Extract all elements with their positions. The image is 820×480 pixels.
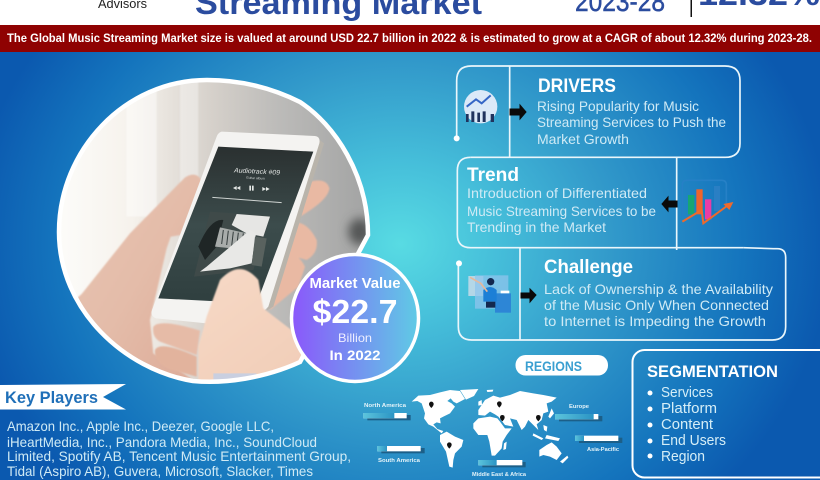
description: Lack of Ownership & the Availability bbox=[544, 281, 773, 297]
photo: hands holding phone bbox=[50, 77, 383, 410]
heading: DRIVERS bbox=[538, 76, 616, 97]
panel: segmentation bbox=[632, 350, 820, 478]
bar: south america bbox=[377, 446, 425, 453]
bar: asia-pacific bbox=[575, 436, 622, 443]
header bbox=[98, 0, 820, 21]
bar: north america bbox=[363, 413, 411, 420]
icon: bar chart bbox=[682, 180, 733, 223]
description: Trending in the Market bbox=[467, 219, 606, 235]
regions pill bbox=[516, 355, 608, 376]
bar: europe bbox=[555, 414, 602, 421]
region labels: Middle East & Africa bbox=[472, 472, 527, 478]
description: Rising Popularity for Music bbox=[537, 98, 699, 114]
list: Services bbox=[661, 385, 713, 401]
description bbox=[544, 281, 773, 329]
summary band bbox=[0, 25, 820, 52]
summary band: The Global Music Streaming Market size is valued at around USD 22.7 billion in 2022 & is estimated to grow at a CAGR of about 12.32% during 2023-28. bbox=[7, 33, 812, 45]
banner bbox=[0, 384, 126, 410]
description: of the Music Only When Connected bbox=[544, 297, 769, 313]
company list bbox=[7, 418, 351, 479]
value: $22.7 bbox=[312, 293, 398, 330]
bar: middle east and africa bbox=[478, 460, 526, 467]
company list: Amazon Inc., Apple Inc., Deezer, Google LLC, bbox=[7, 418, 274, 434]
heading: Challenge bbox=[544, 257, 633, 278]
map pins bbox=[429, 401, 541, 449]
key players bbox=[0, 384, 351, 479]
heading: SEGMENTATION bbox=[647, 363, 778, 381]
regions pill: REGIONS bbox=[525, 359, 582, 374]
region labels: Europe bbox=[569, 404, 589, 410]
market value badge bbox=[292, 254, 418, 382]
panel: challenge bbox=[456, 248, 786, 340]
description: to Internet is Impeding the Growth bbox=[544, 313, 766, 329]
list bbox=[648, 385, 726, 465]
CAGR value bbox=[690, 0, 820, 17]
company list: Limited, Spotify AB, Tencent Music Entertainment Group, bbox=[7, 448, 351, 464]
description bbox=[467, 185, 656, 235]
banner: Key Players bbox=[5, 389, 98, 407]
arrow bbox=[662, 197, 677, 211]
description: Streaming Services to Push the bbox=[537, 114, 726, 130]
company list: iHeartMedia, Inc., Pandora Media, Inc., SoundCloud bbox=[7, 434, 317, 450]
arrow bbox=[510, 105, 526, 119]
list: End Users bbox=[661, 433, 726, 449]
panel: trend bbox=[457, 157, 743, 250]
photo: hands holding phone: Guitar album bbox=[246, 176, 265, 181]
description bbox=[537, 98, 726, 147]
label: market value: Market Value bbox=[310, 276, 400, 292]
unit: Billion bbox=[338, 331, 372, 345]
icon: growth team bbox=[464, 90, 497, 123]
icon: person with screens bbox=[468, 275, 511, 313]
heading: Trend bbox=[467, 165, 519, 186]
arrow bbox=[521, 289, 536, 302]
description: Introduction of Differentiated bbox=[467, 185, 647, 201]
company list: Tidal (Aspiro AB), Guvera, Microsoft, Slacker, Times bbox=[7, 463, 313, 479]
region labels: South America bbox=[378, 458, 421, 464]
description: Market Growth bbox=[537, 131, 629, 147]
list: Platform bbox=[661, 401, 717, 417]
list: Content bbox=[661, 417, 713, 433]
region labels: North America bbox=[364, 403, 407, 409]
panel: drivers bbox=[454, 66, 740, 157]
list: Region bbox=[661, 449, 705, 465]
region labels bbox=[364, 403, 619, 478]
description: Music Streaming Services to be bbox=[467, 203, 656, 219]
region labels: Asia-Pacific bbox=[587, 447, 619, 453]
year: In 2022 bbox=[330, 347, 381, 363]
world map with region bars bbox=[363, 389, 622, 478]
photo: hands holding phone: Audiotrack #09 bbox=[233, 167, 281, 177]
map: continents bbox=[412, 389, 568, 468]
